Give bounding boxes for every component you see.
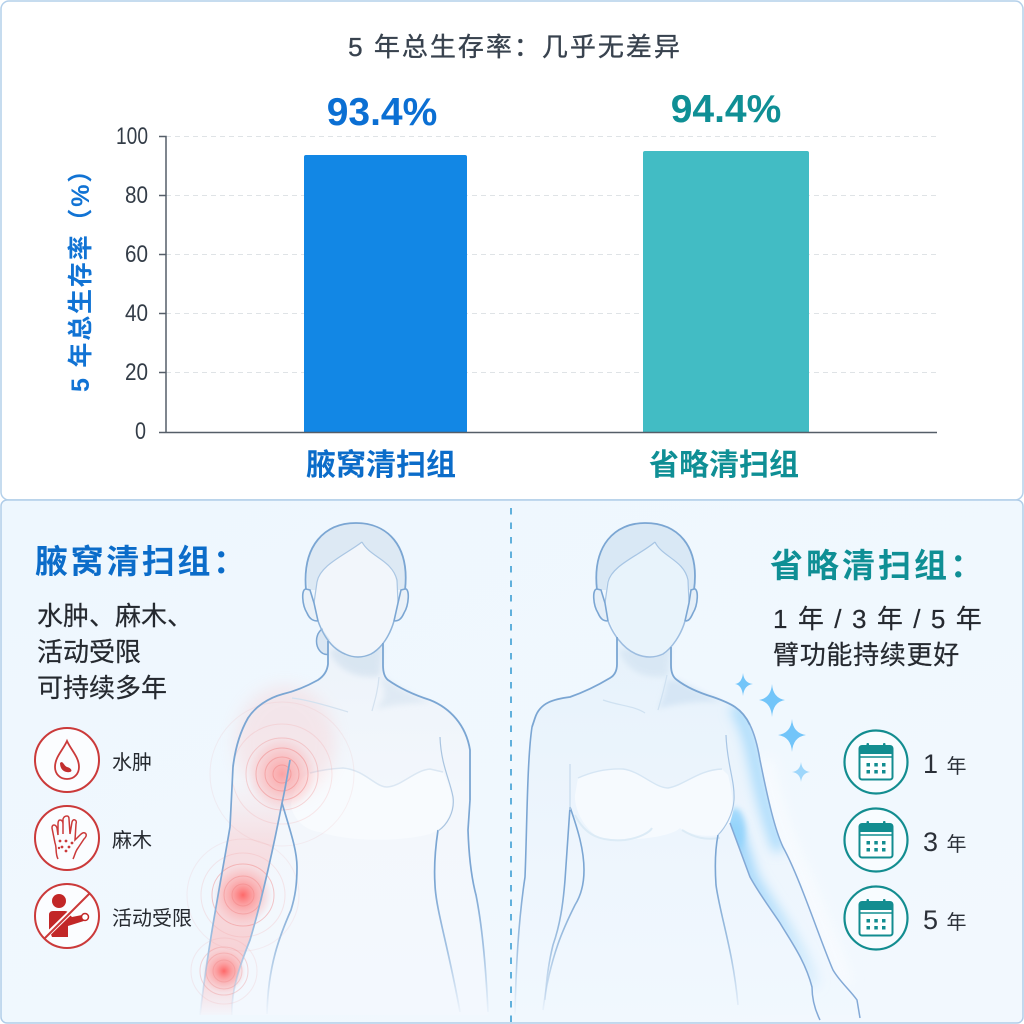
shadows xyxy=(619,645,671,677)
value: omitted group: 94.4% xyxy=(671,88,781,131)
ears xyxy=(303,589,318,621)
axis ticks xyxy=(116,123,148,445)
bun xyxy=(316,628,338,654)
divider xyxy=(510,508,512,1022)
bust xyxy=(291,768,452,840)
axis ticks: 0 xyxy=(135,418,146,445)
ears xyxy=(594,589,608,621)
left text block: 水肿、麻木、 xyxy=(37,601,193,631)
icon: calendar 5 xyxy=(844,886,908,950)
outlines xyxy=(233,621,470,800)
icon: swelling xyxy=(35,728,99,792)
body xyxy=(200,640,488,1015)
label: 1 year: 1 年 xyxy=(923,749,967,779)
sparkles xyxy=(735,673,810,782)
outlines xyxy=(532,621,750,727)
left heading: 腋窝清扫组： xyxy=(35,543,249,580)
red arm glow xyxy=(187,686,354,1020)
right text block xyxy=(773,604,983,670)
right text block: 臂功能持续更好 xyxy=(773,640,960,670)
group label: axillary: 腋窝清扫组 xyxy=(306,449,456,482)
label: numbness: 麻木 xyxy=(112,829,152,852)
bar: axillary group xyxy=(304,155,467,432)
label: swelling: 水肿 xyxy=(112,751,152,774)
left text block: 活动受限 xyxy=(37,637,141,667)
chart title: 5 年总生存率：几乎无差异 xyxy=(348,32,682,62)
y axis label: 5 年总生存率（%） xyxy=(67,156,95,392)
icon: calendar 3 xyxy=(844,808,908,872)
right text block: 1 年 / 3 年 / 5 年 xyxy=(773,604,983,634)
axis ticks: 60 xyxy=(125,241,148,268)
axis ticks: 20 xyxy=(125,359,148,386)
head xyxy=(307,523,405,590)
axis ticks: 80 xyxy=(125,182,148,209)
axis ticks: 40 xyxy=(125,300,148,327)
icon: calendar 1 xyxy=(844,730,908,794)
panel: survival chart xyxy=(1,1,1023,500)
right heading: 省略清扫组： xyxy=(770,547,986,584)
label: 3 years: 3 年 xyxy=(923,827,967,857)
neck shadow xyxy=(329,645,383,677)
left text block: 可持续多年 xyxy=(37,673,167,703)
label: limited mobility: 活动受限 xyxy=(112,907,192,930)
blue arm glow xyxy=(725,706,812,987)
pain rings xyxy=(187,702,354,1004)
panel: arm comparison xyxy=(1,500,1023,1023)
bust xyxy=(575,769,733,840)
head xyxy=(597,523,695,590)
value: axillary group: 93.4% xyxy=(327,91,437,134)
figure: left woman xyxy=(187,523,488,1020)
icon: numbness xyxy=(35,806,99,870)
axes xyxy=(159,136,937,432)
body xyxy=(515,640,860,1015)
left text block xyxy=(37,601,193,703)
bar: omitted group xyxy=(643,151,809,432)
group label: omitted: 省略清扫组 xyxy=(649,449,799,482)
label: 5 years: 5 年 xyxy=(923,905,967,935)
icon: limited mobility xyxy=(35,884,99,948)
bar chart xyxy=(116,123,937,445)
axis ticks: 100 xyxy=(116,123,148,150)
figure: right woman xyxy=(515,523,860,1020)
arm halo xyxy=(765,760,845,985)
